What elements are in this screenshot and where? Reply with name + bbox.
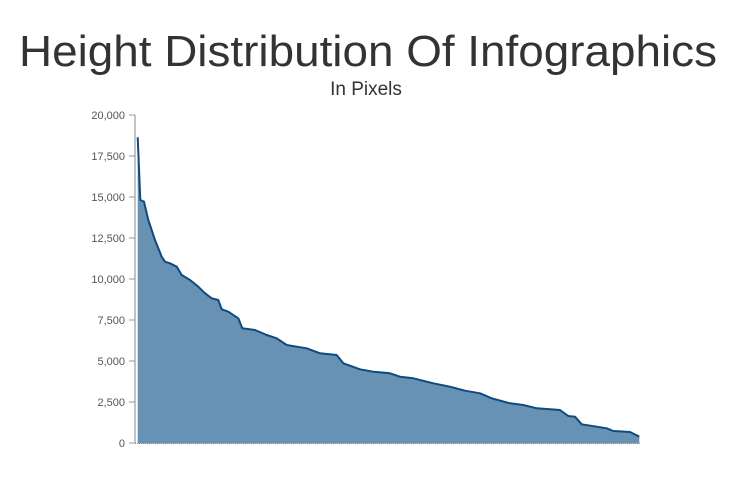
y axis: 10,000 xyxy=(91,274,125,286)
y axis: 7,500 xyxy=(97,315,125,327)
y axis: 5,000 xyxy=(97,356,125,368)
x axis xyxy=(135,442,640,444)
y axis xyxy=(91,110,135,450)
area chart xyxy=(138,137,639,444)
y axis: 20,000 xyxy=(91,110,125,122)
y axis: 17,500 xyxy=(91,151,125,163)
y axis: 0 xyxy=(119,438,125,450)
title: Height Distribution Of Infographics xyxy=(19,27,717,76)
subtitle: In Pixels xyxy=(330,79,402,100)
y axis: 15,000 xyxy=(91,192,125,204)
y axis: 12,500 xyxy=(91,233,125,245)
y axis: 2,500 xyxy=(97,397,125,409)
